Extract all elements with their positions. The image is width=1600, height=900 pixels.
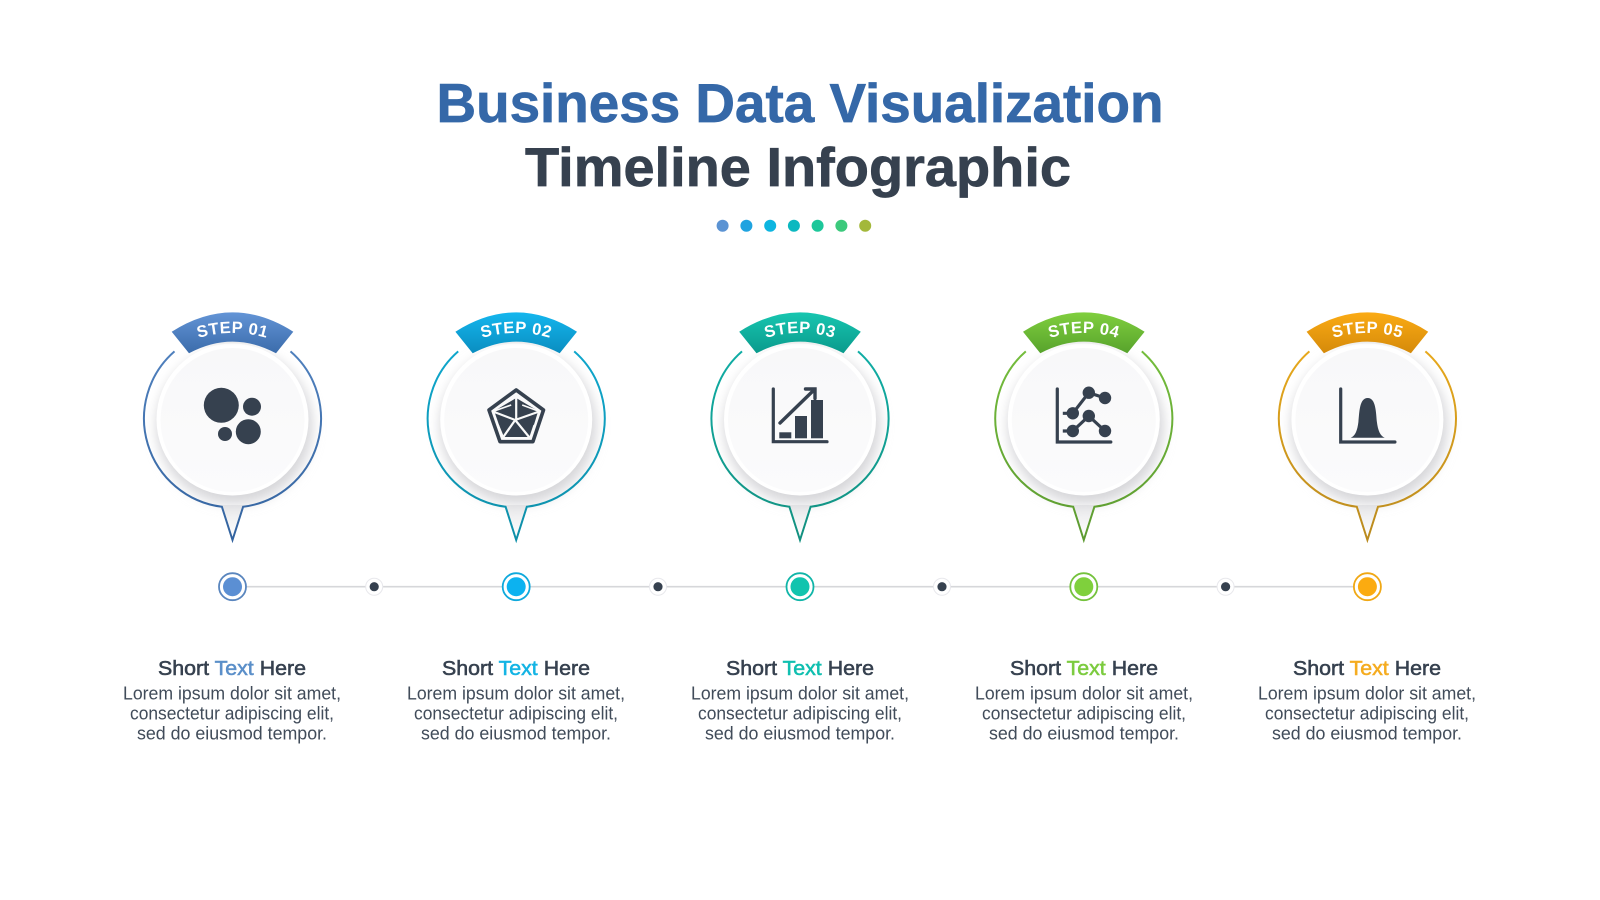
text block: step 04: Lorem ipsum dolor sit amet, (975, 682, 1193, 703)
banner: step 05: STEP 05 (1332, 322, 1403, 337)
text block: step 02: consectetur adipiscing elit, (414, 702, 618, 723)
pin: step 04 (994, 312, 1174, 544)
text block: step 02: sed do eiusmod tempor. (421, 722, 611, 743)
icon: bubble chart (204, 388, 261, 444)
text block: step 05: sed do eiusmod tempor. (1272, 722, 1462, 743)
text block: step 03: Lorem ipsum dolor sit amet, (691, 682, 909, 703)
icon: line chart (1057, 386, 1111, 442)
banner: step 04 (1023, 312, 1144, 354)
timeline node 4 (1070, 573, 1097, 600)
pin: step 05 (1278, 312, 1457, 544)
banner: step 05 (1306, 312, 1428, 354)
timeline node 2 (503, 573, 530, 600)
text block: step 05: Short Text Here (1293, 657, 1441, 680)
text block: step 01: consectetur adipiscing elit, (130, 702, 334, 723)
text block: step 01: sed do eiusmod tempor. (137, 722, 327, 743)
pin: step 03 (710, 312, 890, 543)
text block: step 04: sed do eiusmod tempor. (989, 722, 1179, 743)
timeline node 1 (219, 573, 246, 600)
icon: bell curve (1341, 389, 1395, 442)
banner: step 01 (172, 312, 294, 354)
title (436, 72, 1164, 198)
banner: step 04: STEP 04 (1048, 322, 1119, 338)
text block: step 05 (1258, 657, 1476, 743)
banner: step 01: STEP 01 (197, 322, 266, 338)
banner: step 02: STEP 02 (481, 322, 552, 338)
text block: step 02 (407, 657, 625, 743)
connector dot 2 (650, 578, 666, 595)
connector dot 4 (1217, 578, 1234, 595)
text block: step 01 (123, 657, 341, 743)
text block: step 04: consectetur adipiscing elit, (982, 702, 1186, 723)
connector dot 1 (366, 578, 383, 595)
decorative dot row (717, 220, 871, 232)
text block: step 04 (975, 657, 1193, 743)
banner: step 03 (739, 312, 861, 354)
text block: step 03 (691, 657, 909, 743)
icon: bar chart with arrow (773, 389, 827, 442)
icon: radar chart (489, 390, 544, 442)
text block: step 03: sed do eiusmod tempor. (705, 722, 895, 743)
text block: step 03: consectetur adipiscing elit, (698, 702, 902, 723)
timeline node 5 (1354, 573, 1381, 600)
text block: step 04: Short Text Here (1010, 657, 1158, 680)
text block: step 02: Lorem ipsum dolor sit amet, (407, 682, 625, 703)
text block: step 03: Short Text Here (726, 657, 874, 680)
pin: step 02 (426, 312, 606, 544)
title line 2: Timeline Infographic (525, 136, 1071, 198)
pin: step 01 (142, 312, 322, 543)
text block: step 05: consectetur adipiscing elit, (1265, 702, 1469, 723)
timeline (219, 573, 1381, 600)
text block: step 02: Short Text Here (442, 657, 590, 680)
banner: step 03: STEP 03 (764, 322, 836, 337)
text block: step 01: Lorem ipsum dolor sit amet, (123, 682, 341, 703)
text block: step 01: Short Text Here (158, 657, 306, 680)
connector dot 3 (934, 578, 950, 595)
banner: step 02 (456, 312, 577, 354)
title line 1: Business Data Visualization (436, 72, 1164, 134)
text block: step 05: Lorem ipsum dolor sit amet, (1258, 682, 1476, 703)
timeline node 3 (786, 573, 814, 600)
